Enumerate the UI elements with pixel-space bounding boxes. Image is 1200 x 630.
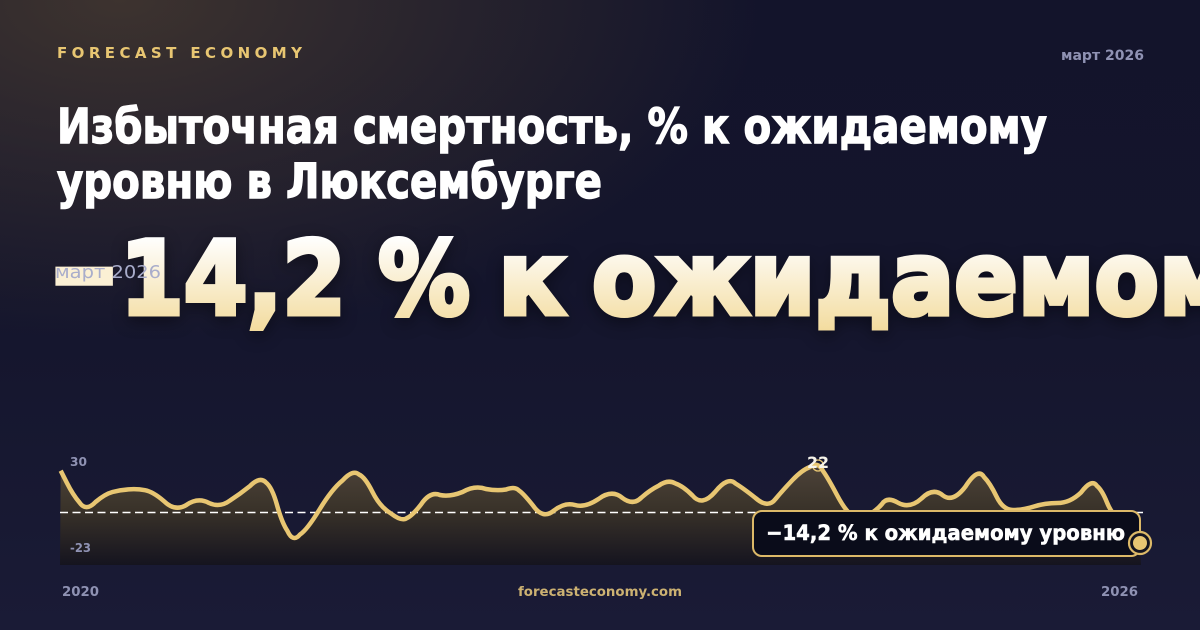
brand label: FORECAST ECONOMY bbox=[57, 44, 303, 62]
callout text: −14,2 % к ожидаемому уровню bbox=[766, 521, 1125, 545]
big value bbox=[120, 220, 1200, 339]
chart area bbox=[60, 465, 1141, 565]
date top right: март 2026 bbox=[1061, 48, 1144, 64]
zero baseline bbox=[60, 512, 1146, 514]
big value: 14,2 bbox=[120, 220, 346, 339]
big minus sign: − bbox=[46, 175, 123, 368]
title bbox=[57, 99, 1047, 210]
source url: forecasteconomy.com bbox=[518, 584, 682, 600]
y axis minimum: -23 bbox=[70, 540, 91, 555]
line chart bbox=[60, 453, 1146, 565]
big value: % bbox=[378, 220, 470, 339]
callout bbox=[753, 511, 1140, 556]
callout box bbox=[753, 511, 1140, 556]
peak marker bbox=[812, 460, 824, 471]
axis end year: 2026 bbox=[1101, 584, 1138, 600]
axis start year: 2020 bbox=[62, 584, 99, 600]
title: уровню в Люксембурге bbox=[57, 154, 602, 210]
end marker bbox=[1129, 532, 1151, 554]
chart line bbox=[61, 465, 1140, 543]
peak label: 22 bbox=[807, 453, 829, 472]
y axis maximum: 30 bbox=[70, 454, 87, 469]
overlapping date label: март 2026 bbox=[55, 262, 161, 283]
title: Избыточная смертность, % к ожидаемому bbox=[57, 99, 1047, 155]
big value: к bbox=[498, 220, 566, 339]
